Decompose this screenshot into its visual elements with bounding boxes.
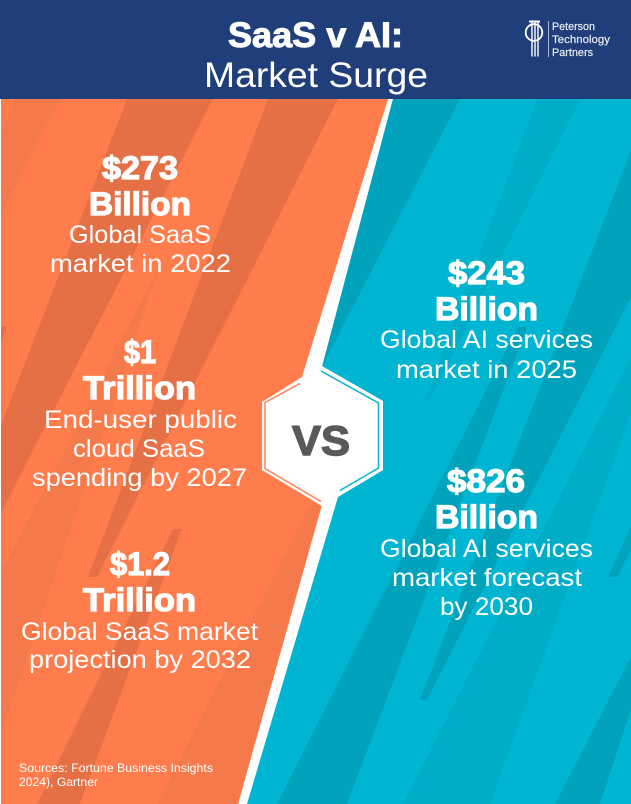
icon: pillar and circle — [526, 22, 542, 56]
sources note: 2024), Gartner — [19, 777, 98, 789]
logo: Peterson Technology Partners: Peterson — [552, 21, 595, 33]
VS hexagon badge — [262, 366, 383, 506]
stat: $243 Billion AI services — [380, 255, 593, 384]
stat: $243 Billion AI services: Global AI services — [380, 326, 593, 354]
stat: $273 Billion SaaS market — [50, 150, 231, 278]
stat: $826 Billion AI forecast: Billion — [435, 499, 538, 535]
stat: $1 Trillion cloud SaaS spending — [32, 334, 247, 492]
stat: $826 Billion AI forecast: by 2030 — [440, 593, 533, 621]
title — [204, 16, 428, 95]
stat: $1 Trillion cloud SaaS spending: cloud SaaS — [73, 435, 205, 463]
stat: $1.2 Trillion SaaS projection — [21, 546, 258, 674]
stat: $273 Billion SaaS market: Global SaaS — [69, 221, 211, 249]
logo: Peterson Technology Partners: Partners — [552, 47, 593, 59]
stat: $1.2 Trillion SaaS projection: Trillion — [83, 582, 196, 618]
stat: $826 Billion AI forecast: Global AI services — [380, 535, 593, 563]
stat: $273 Billion SaaS market: market in 2022 — [50, 250, 231, 278]
title: Market Surge — [204, 56, 428, 95]
sources note: Sources: Fortune Business Insights — [19, 763, 213, 775]
panel: AI teal side — [247, 99, 631, 804]
stat: $1 Trillion cloud SaaS spending: spending by 2027 — [32, 464, 247, 492]
logo: Peterson Technology Partners: Technology — [552, 34, 611, 46]
header band — [0, 0, 631, 99]
stat: $1 Trillion cloud SaaS spending: End-user public — [44, 406, 237, 434]
stat: $1 Trillion cloud SaaS spending: Trillion — [83, 370, 196, 406]
stat: $1 Trillion cloud SaaS spending: $1 — [124, 334, 156, 370]
stat: $273 Billion SaaS market: Billion — [89, 186, 191, 222]
panel: SaaS orange side — [1, 99, 388, 804]
stat: $243 Billion AI services: $243 — [448, 255, 525, 291]
stat: $273 Billion SaaS market: $273 — [102, 150, 178, 186]
stat: $243 Billion AI services: market in 2025 — [396, 356, 577, 384]
stat: $1.2 Trillion SaaS projection: $1.2 — [110, 546, 170, 582]
logo: Peterson Technology Partners — [526, 21, 611, 59]
stat: $826 Billion AI forecast: market forecast — [392, 564, 582, 592]
VS label: VS — [292, 417, 350, 464]
title: SaaS v AI: — [228, 16, 403, 55]
sources note — [19, 763, 213, 789]
stat: $1.2 Trillion SaaS projection: Global SaaS market — [21, 618, 258, 646]
stat: $826 Billion AI forecast — [380, 463, 593, 621]
stat: $243 Billion AI services: Billion — [435, 291, 538, 327]
stat: $826 Billion AI forecast: $826 — [447, 463, 525, 499]
stat: $1.2 Trillion SaaS projection: projection by 2032 — [29, 646, 251, 674]
